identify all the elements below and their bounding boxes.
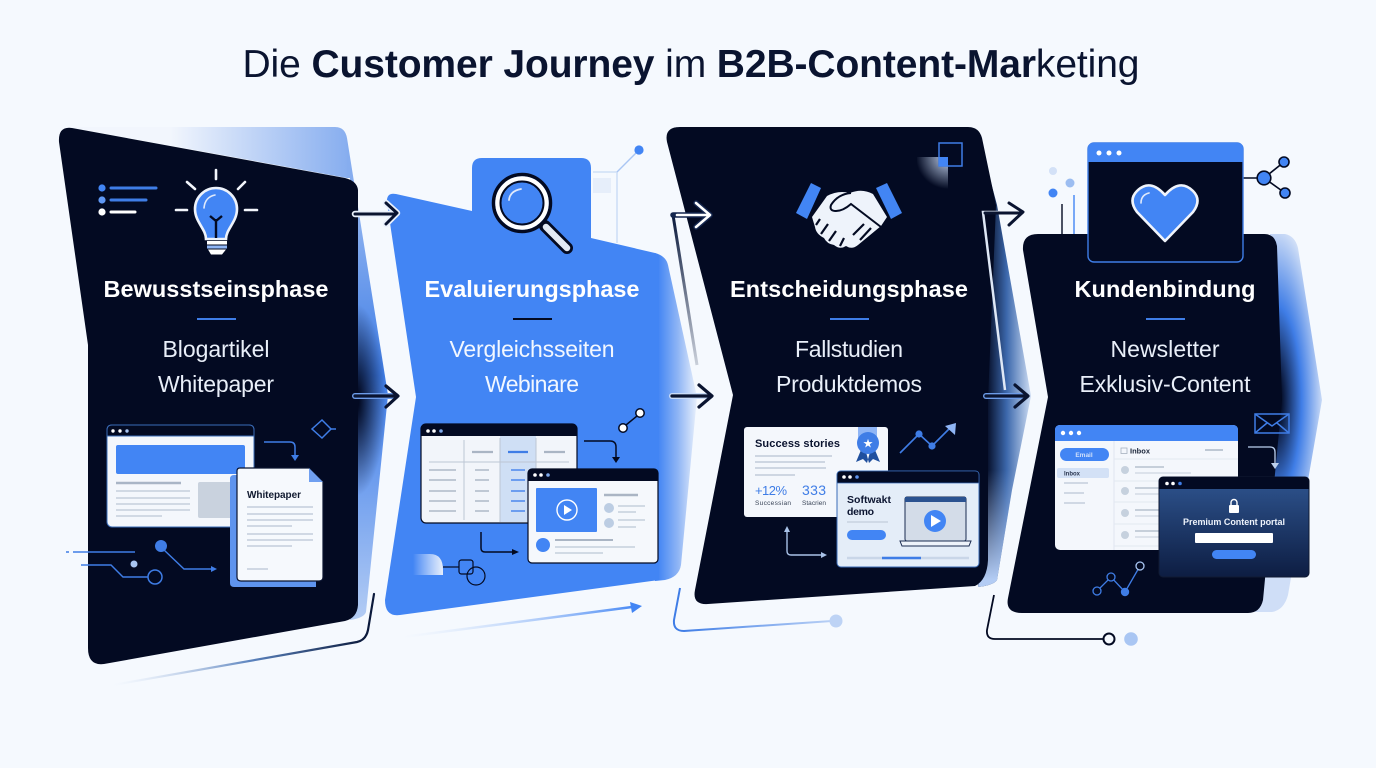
icon: magnifier — [494, 174, 567, 248]
premium content window — [1159, 477, 1309, 577]
document: Whitepaper: Whitepaper — [247, 490, 301, 501]
heading: Kundenbindung — [1074, 276, 1256, 302]
inbox window: Email — [1075, 452, 1093, 459]
inbox window: Inbox — [1064, 472, 1081, 478]
webinar video window — [528, 469, 658, 563]
arrow: phase 1 to 2 top — [355, 203, 397, 224]
panel 4 dark body — [1008, 234, 1282, 613]
icon: heart — [1132, 185, 1198, 241]
card: success stories: 333 — [802, 482, 826, 498]
document: Whitepaper — [230, 468, 323, 587]
software demo window — [837, 471, 979, 567]
body text: Webinare — [485, 371, 579, 397]
comparison table window — [421, 424, 577, 523]
body text — [1080, 336, 1251, 397]
arrow: phase 1 to 2 middle — [355, 386, 398, 407]
icon: node pair — [619, 409, 644, 432]
divider — [830, 318, 869, 320]
icon: lock — [1229, 500, 1239, 513]
body text: Produktdemos — [776, 371, 922, 397]
card: success stories: +12% — [755, 483, 787, 498]
icon: light bulb — [176, 170, 257, 254]
body text: Vergleichsseiten — [450, 336, 614, 362]
panel 1 blue back layer right — [347, 138, 388, 620]
decoration: square — [917, 143, 962, 190]
card: success stories: ★ — [863, 436, 873, 450]
panel 3 dark body — [667, 127, 996, 604]
heading: Evaluierungsphase — [424, 276, 640, 302]
body text: Blogartikel — [162, 336, 270, 362]
inbox window — [1055, 425, 1238, 550]
decoration: node line — [593, 145, 644, 243]
panel: Evaluierungsphase — [385, 145, 697, 615]
premium content window: Premium Content portal — [1183, 517, 1285, 527]
divider — [1146, 318, 1185, 320]
inbox window: Inbox — [1130, 446, 1151, 456]
heading: Entscheidungsphase — [730, 276, 968, 302]
panel 2 blue body — [385, 158, 659, 615]
panel: Entscheidungsphase — [667, 127, 1031, 604]
body text — [450, 336, 614, 397]
body text — [158, 336, 274, 397]
arrow: phase 3 to 4 middle — [986, 385, 1028, 407]
body text: Fallstudien — [795, 336, 903, 362]
arrow: table to video top — [584, 441, 620, 463]
icon: handshake — [796, 183, 902, 248]
chart: growth arrow — [900, 423, 956, 453]
card: success stories: Successian — [755, 500, 791, 507]
arrow: phase 2 to 3 top — [673, 203, 710, 365]
panel 4 blue back layer — [1255, 234, 1322, 612]
circuit lines — [66, 540, 217, 584]
chart: node line — [1093, 562, 1144, 596]
connector line under panel 1 — [113, 594, 374, 685]
panel 1 blue back layer top — [70, 127, 347, 178]
arrow: inbox to portal — [1248, 447, 1279, 469]
title: Die Customer Journey im B2B-Content-Marketing — [242, 43, 1140, 86]
connector under panel 4 — [987, 595, 1138, 646]
panel: Kundenbindung — [1008, 143, 1322, 613]
arrow: card to demo — [784, 526, 827, 558]
panel 1 dark glow — [358, 290, 388, 500]
body text: Newsletter — [1110, 336, 1220, 362]
icon: shapes — [413, 554, 485, 585]
panel 3 light back layer — [975, 160, 1031, 587]
connector under panel 3 — [674, 588, 842, 631]
icon: list — [98, 184, 156, 216]
arrow: phase 2 to 3 middle — [672, 385, 712, 407]
body text: Exklusiv-Content — [1080, 371, 1251, 397]
body text: Whitepaper — [158, 371, 274, 397]
body text — [776, 336, 922, 397]
panel 3 pale lower layer — [978, 470, 1016, 587]
icon: share nodes — [1243, 157, 1290, 198]
card: success stories: Success stories — [755, 438, 840, 450]
arrow: phase 3 to 4 top — [983, 203, 1023, 390]
heart window — [1088, 143, 1243, 262]
decoration: dots and lines — [1048, 167, 1074, 234]
arrow under panel 2 — [403, 602, 642, 637]
panel: Bewusstseinsphase — [59, 127, 388, 664]
panel 2 light back layer — [655, 253, 697, 581]
icon: diamond node — [312, 420, 336, 438]
card: success stories: Stacrien — [802, 500, 826, 507]
heading: Bewusstseinsphase — [104, 276, 328, 302]
software demo window: demo — [847, 506, 874, 518]
panel 1 dark body — [59, 128, 358, 664]
arrow: table to video left — [481, 532, 519, 555]
arrow: browser to document — [264, 442, 299, 461]
software demo window: Softwakt — [847, 494, 892, 506]
icon: envelope — [1255, 414, 1289, 433]
divider — [513, 318, 552, 320]
card: success stories — [744, 427, 888, 517]
browser window: blog article — [107, 425, 254, 527]
divider — [197, 318, 236, 320]
